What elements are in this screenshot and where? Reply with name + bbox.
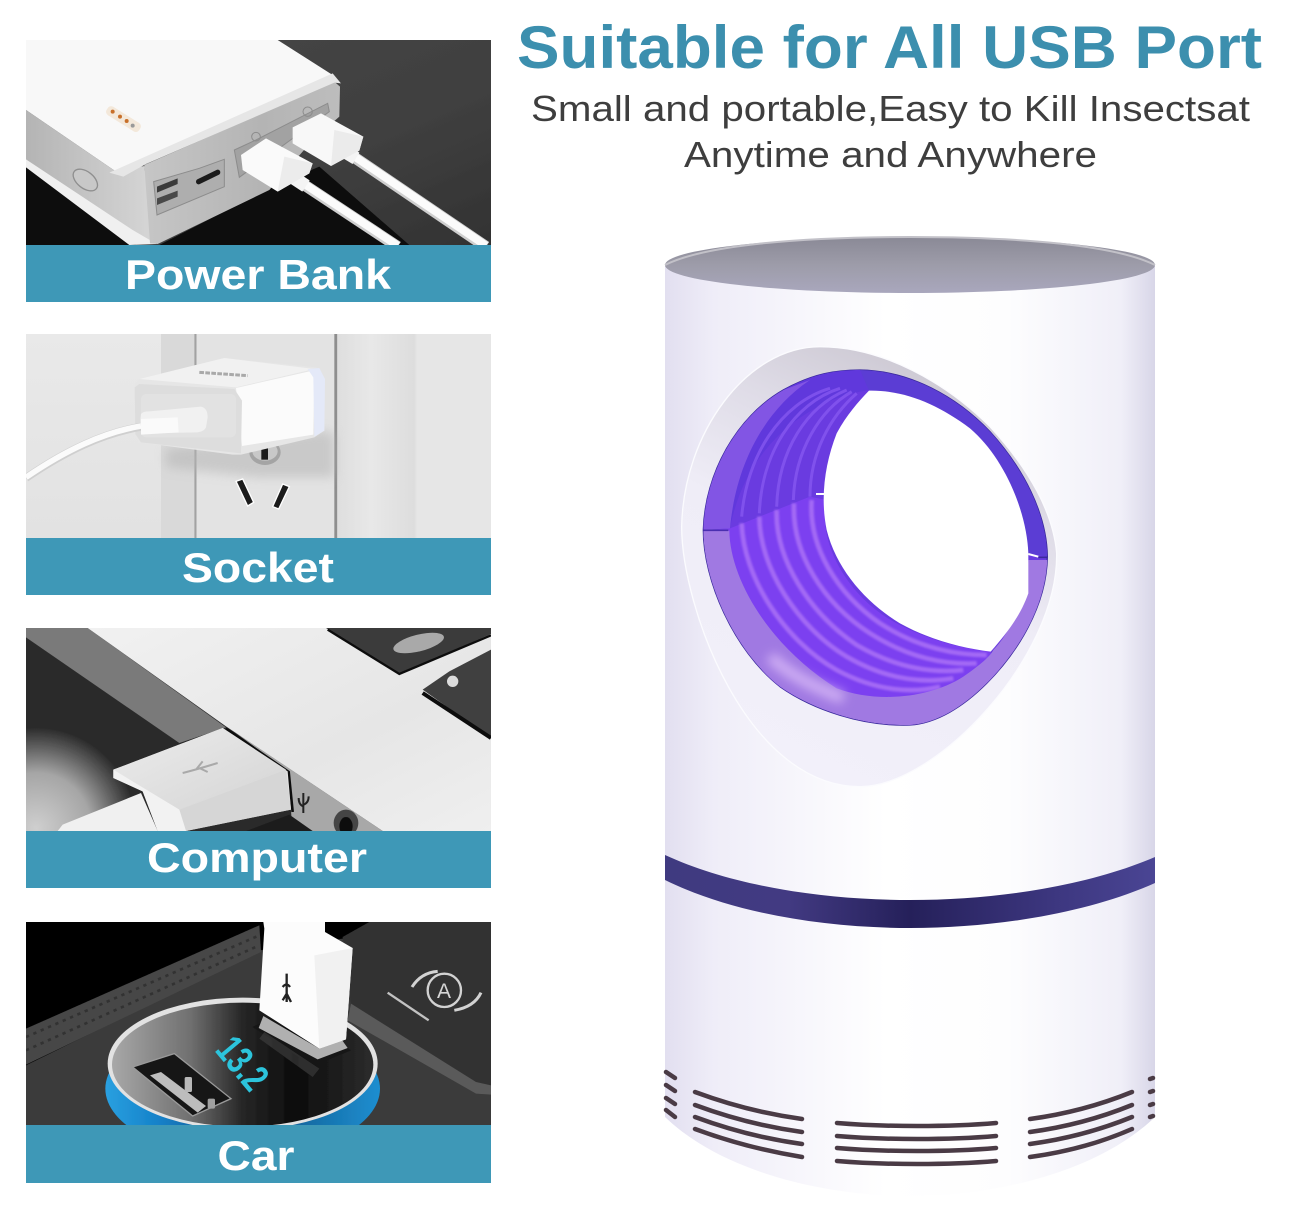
label bar: Socket [26,538,491,595]
title: Suitable for All USB Port [517,14,1262,81]
label: charger voltage digits: 13.2 [207,1028,277,1099]
photo: charger in wall socket [26,334,491,538]
label bar: Car [26,1125,491,1183]
label bar: Socket: Socket [182,544,334,591]
lamp body [665,265,1155,1196]
subtitle: Small and portable,Easy to Kill Insectsat [531,88,1250,129]
opening with violet light ring [682,347,1057,787]
label bar: Computer: Computer [147,834,367,881]
lamp top rim [665,237,1155,293]
panel: socket [26,334,491,595]
see-through centre [824,391,1028,652]
inner ribs and lips [703,370,1047,727]
photo: USB car charger [26,922,491,1125]
label bar: Power Bank: Power Bank [125,251,392,298]
subtitle [531,88,1250,175]
panel: power bank [26,40,491,302]
photo: power bank with two USB cables [26,40,491,247]
subtitle: Anytime and Anywhere [684,134,1097,175]
dark violet band [665,855,1155,928]
panel: car [26,922,491,1183]
photo: USB plug in laptop [26,628,491,836]
violet ring [703,370,1047,725]
label bar: Computer [26,831,491,888]
label bar: Power Bank [26,245,491,302]
product: mosquito lamp [665,237,1155,1196]
label bar: Car: Car [218,1132,294,1179]
cut-away recess [682,347,1057,787]
air vents [666,1072,1153,1164]
heading block [517,14,1262,175]
panel: computer [26,628,491,888]
icon: A button symbol: A [437,980,451,1003]
